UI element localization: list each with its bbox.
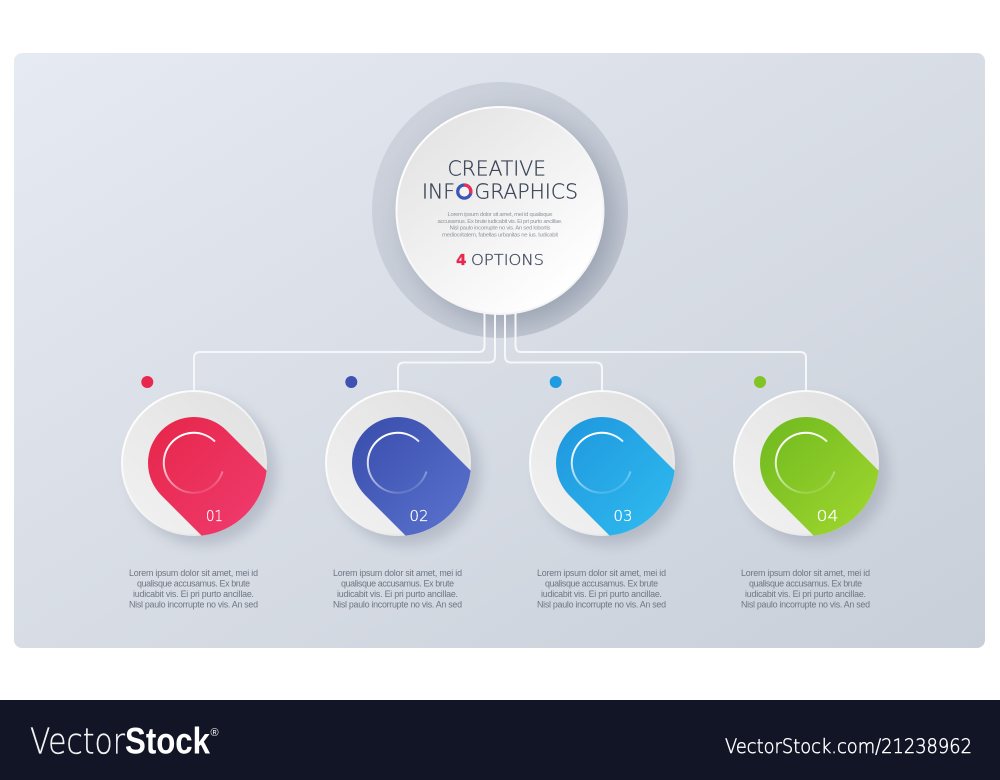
option 04 text: iudicabit vis. Ei pri purto ancillae. <box>745 589 866 599</box>
marker dot 02 <box>345 376 357 388</box>
option 03 text: qualisque accusamus. Ex brute <box>545 578 658 588</box>
hub description <box>438 212 563 238</box>
coloured badge <box>556 417 675 536</box>
option 02 text: Lorem ipsum dolor sit amet, mei id <box>333 568 462 578</box>
marker dot 04 <box>754 376 766 388</box>
connector lines <box>194 312 806 392</box>
options count: OPTIONS <box>471 251 544 269</box>
option 03 text: iudicabit vis. Ei pri purto ancillae. <box>541 589 662 599</box>
option 01 text <box>129 568 258 610</box>
option 04 text <box>741 568 870 610</box>
progress arc <box>368 433 426 493</box>
number: 03 <box>614 507 632 525</box>
central hub <box>396 107 604 314</box>
hub title: CREATIVE <box>448 156 546 180</box>
hub description: Nisl paulo incorrupte no vis. An sed lobortis <box>450 226 551 232</box>
hub title: INF <box>422 180 455 204</box>
option disc <box>326 391 470 535</box>
coloured badge <box>760 417 879 536</box>
hub halo ring <box>372 82 628 338</box>
options count: 4 <box>456 251 467 269</box>
option 01 text: Nisl paulo incorrupte no vis. An sed <box>129 600 258 610</box>
option disc <box>122 391 266 535</box>
option 03 <box>530 391 684 545</box>
option 03 text: Nisl paulo incorrupte no vis. An sed <box>537 600 666 610</box>
footer logo <box>30 720 219 762</box>
option 01 <box>122 391 276 545</box>
disc shadow <box>130 399 276 545</box>
number: 01 <box>206 507 223 525</box>
option 01 text: Lorem ipsum dolor sit amet, mei id <box>129 568 258 578</box>
disc shadow <box>538 399 684 545</box>
coloured badge <box>148 417 267 536</box>
progress arc <box>164 433 222 493</box>
option 04 text: Lorem ipsum dolor sit amet, mei id <box>741 568 870 578</box>
option 02 text <box>333 568 462 610</box>
number: 02 <box>410 507 428 525</box>
number: 04 <box>816 507 838 525</box>
option 04 text: qualisque accusamus. Ex brute <box>749 578 862 588</box>
option 03 text: Lorem ipsum dolor sit amet, mei id <box>537 568 666 578</box>
hub description: Lorem ipsum dolor sit amet, mei id qualisque <box>448 212 553 218</box>
option 03 text <box>537 568 666 610</box>
option 02 text: qualisque accusamus. Ex brute <box>341 578 454 588</box>
icon: coloured letter O: O <box>457 182 472 202</box>
footer logo: Vector <box>30 722 125 762</box>
option 04 text: Nisl paulo incorrupte no vis. An sed <box>741 600 870 610</box>
hub disc <box>396 107 604 314</box>
marker dot 03 <box>550 376 562 388</box>
progress arc <box>776 433 834 493</box>
footer logo: ® <box>210 727 219 739</box>
option 02 text: Nisl paulo incorrupte no vis. An sed <box>333 600 462 610</box>
background panel <box>14 53 985 648</box>
option disc <box>734 391 878 535</box>
hub title: GRAPHICS <box>474 180 578 204</box>
option disc <box>530 391 674 535</box>
option 04 <box>734 391 888 545</box>
footer logo: Stock <box>125 720 210 762</box>
coloured badge <box>352 417 471 536</box>
disc shadow <box>742 399 888 545</box>
hub title <box>422 156 578 204</box>
option 01 text: iudicabit vis. Ei pri purto ancillae. <box>133 589 254 599</box>
option 02 <box>326 391 480 545</box>
disc shadow <box>334 399 480 545</box>
hub description: accusamus. Ex brute iudicabit vis. Ei pri purto ancillae. <box>438 219 563 225</box>
progress arc <box>572 433 630 493</box>
hub description: mediocritatem, fabellas urbanitas ne ius. Iudicabit <box>442 232 558 238</box>
footer bar <box>0 700 1000 780</box>
option 02 text: iudicabit vis. Ei pri purto ancillae. <box>337 589 458 599</box>
marker dot 01 <box>141 376 153 388</box>
footer image id: VectorStock.com/21238962 <box>725 735 972 758</box>
option 01 text: qualisque accusamus. Ex brute <box>137 578 250 588</box>
